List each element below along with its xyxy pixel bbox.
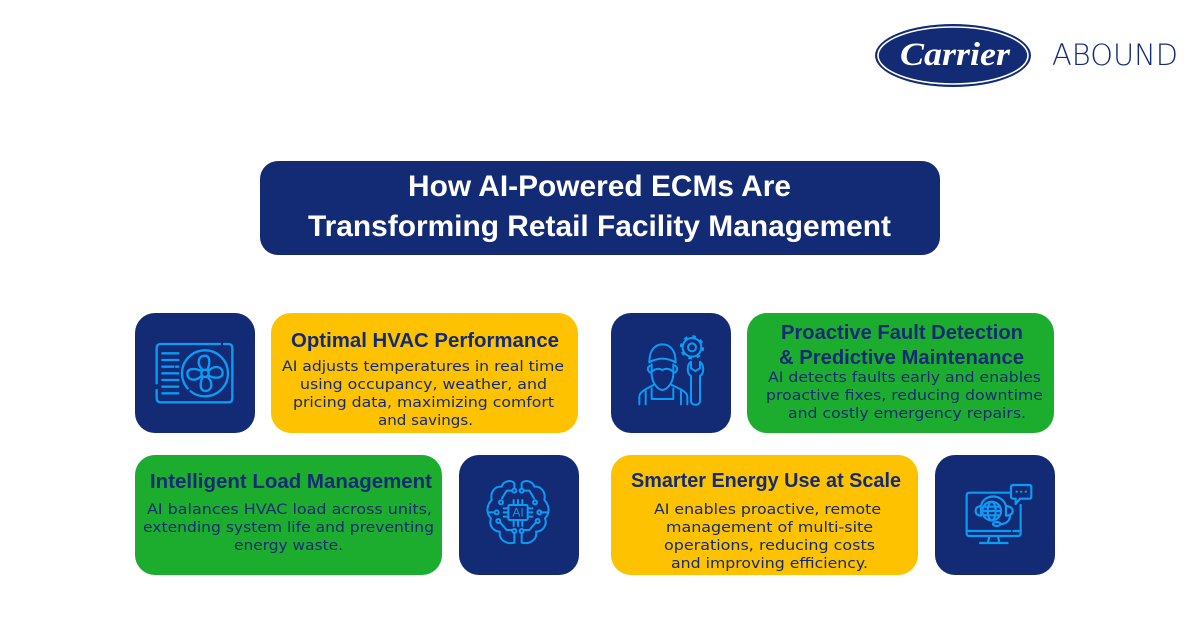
icon: AI brain xyxy=(459,455,579,575)
card: optimal HVAC text: AI adjusts temperatures in real time xyxy=(282,359,564,375)
panel: smarter energy use xyxy=(611,455,1055,575)
title banner: How AI-Powered ECMs Are xyxy=(408,170,791,203)
card: load management text: energy waste. xyxy=(234,538,343,554)
card: energy use text: management of multi-site xyxy=(666,520,873,536)
card: optimal HVAC text xyxy=(271,313,578,433)
card: optimal HVAC text: and savings. xyxy=(378,413,473,429)
logo: Abound: ABOUND xyxy=(1052,38,1178,72)
card: energy use text: operations, reducing costs xyxy=(664,538,875,554)
card: energy use text: AI enables proactive, remote xyxy=(654,502,881,518)
logo: Carrier: Carrier xyxy=(900,37,1011,73)
icon: technician with wrench and gear xyxy=(611,313,731,433)
logo: Carrier xyxy=(875,24,1031,87)
icon: air conditioner fan xyxy=(135,313,255,433)
card: fault detection text: & Predictive Maintenance xyxy=(779,347,1024,369)
card: energy use text: Smarter Energy Use at Scale xyxy=(631,470,901,492)
card: fault detection text xyxy=(747,313,1054,433)
card: load management text: AI balances HVAC load across units, xyxy=(147,502,432,518)
card: fault detection text: proactive fixes, reducing downtime xyxy=(766,388,1043,404)
panel: intelligent load management xyxy=(135,455,579,575)
title banner: Transforming Retail Facility Management xyxy=(308,210,891,243)
card: fault detection text: AI detects faults early and enables xyxy=(768,370,1041,386)
panel: proactive fault detection xyxy=(611,313,1054,433)
icon: AI brain: AI xyxy=(512,506,524,520)
card: load management text: extending system life and preventing xyxy=(143,520,434,536)
panel: optimal HVAC performance xyxy=(135,313,578,433)
card: optimal HVAC text: Optimal HVAC Performance xyxy=(291,330,559,352)
title banner xyxy=(260,161,940,255)
card: load management text xyxy=(135,455,442,575)
card: optimal HVAC text: using occupancy, weather, and xyxy=(300,377,547,393)
card: energy use text: and improving efficiency. xyxy=(671,556,868,572)
card: energy use text xyxy=(611,455,918,575)
card: fault detection text: and costly emergency repairs. xyxy=(788,406,1026,422)
card: load management text: Intelligent Load Management xyxy=(150,471,432,493)
card: optimal HVAC text: pricing data, maximizing comfort xyxy=(293,395,555,411)
icon: monitor with globe headset xyxy=(935,455,1055,575)
card: fault detection text: Proactive Fault Detection xyxy=(781,322,1023,344)
